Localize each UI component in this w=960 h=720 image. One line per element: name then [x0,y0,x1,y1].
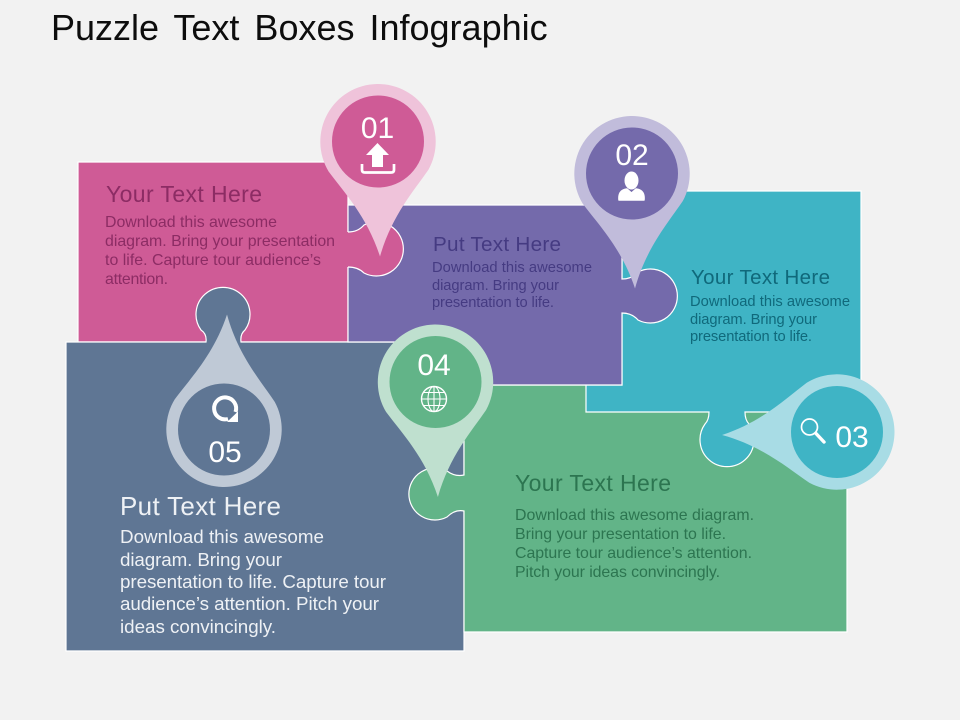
icon: refresh [214,397,238,422]
text block: purple panel [432,233,592,311]
pin 05 [165,313,285,488]
text block: pink panel: diagram. Bring your presentation [105,233,335,250]
pin 02: 02 [615,139,649,172]
text block: teal panel: Download this awesome [690,294,850,310]
pin 03: 03 [835,421,869,454]
pin 04: 04 [417,349,451,382]
pin 03 [721,373,896,493]
icon: person [619,172,644,200]
icon: globe [422,386,446,412]
puzzle tab: pink over purple [346,222,403,276]
text block: pink panel [105,181,335,288]
puzzle piece: slate [66,287,464,651]
text block: teal panel: Your Text Here [691,266,830,289]
text block: green panel: Download this awesome diagram. [515,507,754,524]
text block: teal panel: presentation to life. [690,329,812,345]
text block: purple panel: diagram. Bring your [432,278,559,294]
text block: pink panel: Download this awesome [105,214,277,231]
text block: green panel: Pitch your ideas convincingly. [515,564,720,581]
text block: slate panel: Put Text Here [120,491,281,521]
pin 05: 05 [208,436,242,469]
pin 01: 01 [361,112,394,145]
text block: slate panel: diagram. Bring your [120,549,282,570]
text block: pink panel: attention. [105,271,168,288]
text block: pink panel: Your Text Here [106,181,262,207]
text block: slate panel: presentation to life. Capture tour [120,571,386,592]
text block: purple panel: presentation to life. [432,295,554,311]
puzzle piece: purple [348,205,677,385]
pin 04 [377,323,496,498]
pin 01 [319,83,438,257]
title: Puzzle Text Boxes Infographic [51,7,548,48]
text block: slate panel: ideas convincingly. [120,616,276,637]
puzzle piece: pink [78,162,403,342]
puzzle piece: teal [586,191,861,467]
icon: magnifier [802,419,824,442]
pin 02 [573,115,693,290]
text block: green panel: Bring your presentation to life. [515,526,726,543]
icon: upload [362,143,394,172]
text block: green panel: Capture tour audience’s attention. [515,545,752,562]
text block: purple panel: Put Text Here [433,233,561,256]
text block: green panel [515,470,754,581]
text block: purple panel: Download this awesome [432,260,592,276]
text block: green panel: Your Text Here [515,470,671,496]
text block: slate panel: audience’s attention. Pitch your [120,593,379,614]
text block: pink panel: to life. Capture tour audience’s [105,252,321,269]
text block: slate panel [120,491,386,637]
text block: teal panel [690,266,850,345]
puzzle piece: green [409,385,847,632]
text block: teal panel: diagram. Bring your [690,312,817,328]
text block: slate panel: Download this awesome [120,526,324,547]
